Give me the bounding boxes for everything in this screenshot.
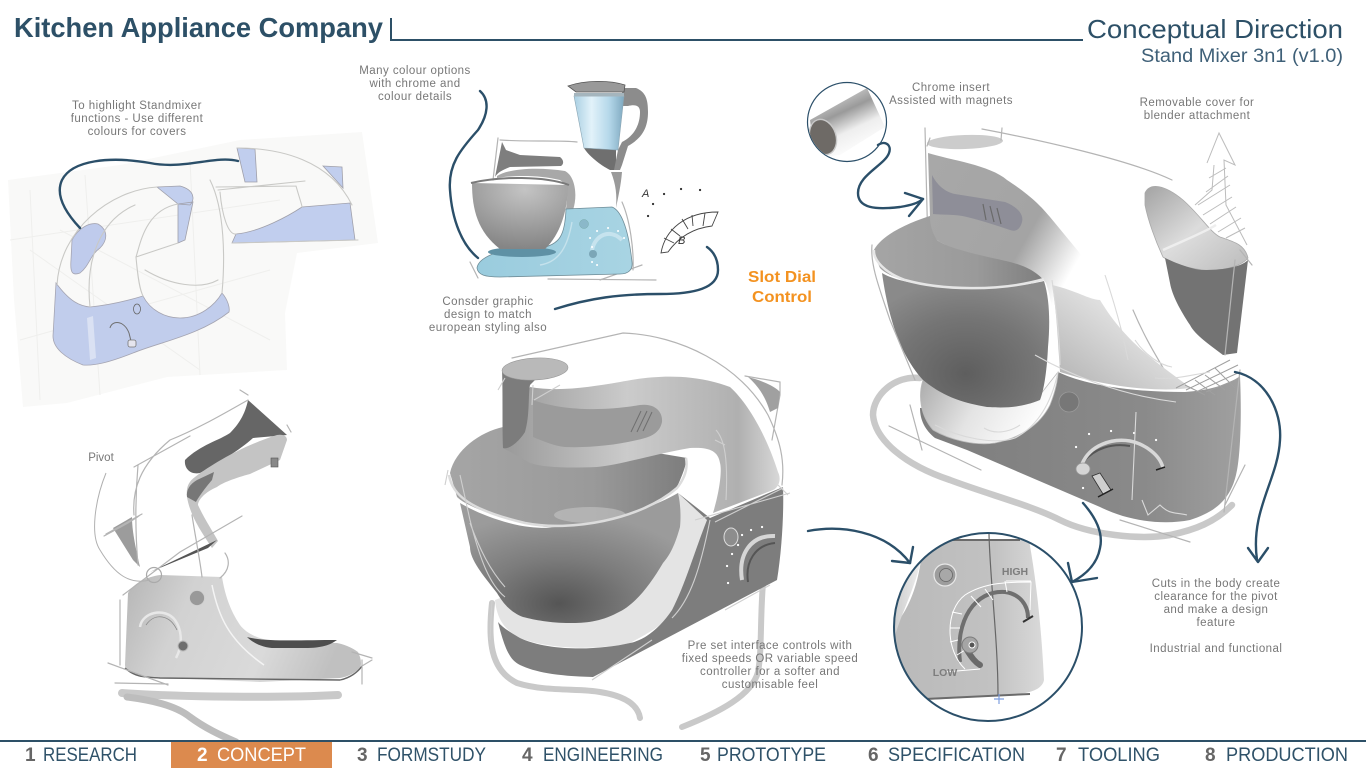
- circle ring: [894, 533, 1082, 721]
- arm: [503, 377, 780, 513]
- note: colour options: with chrome and: [368, 78, 461, 90]
- pencil outlines: [57, 180, 224, 307]
- sketch contour: [925, 128, 1172, 385]
- side button: [190, 590, 204, 606]
- side dial: [140, 613, 181, 658]
- surface sketch lines: [935, 275, 1210, 515]
- note: graphic design: european styling also: [429, 322, 547, 334]
- header rule: [391, 18, 1083, 40]
- note: body cuts: feature: [1197, 617, 1235, 629]
- arrow: graphic design: [555, 247, 718, 309]
- blue crosshair: [994, 694, 1004, 704]
- pivot circle: [146, 568, 162, 582]
- panel: blue marker sketch: [8, 100, 378, 407]
- slot: [932, 175, 1022, 231]
- step 2: CONCEPT: [217, 745, 306, 766]
- note: interface controls: [682, 640, 858, 691]
- bowl recess: [488, 247, 556, 257]
- arm tip: [271, 458, 278, 467]
- note: interface controls: customisable feel: [722, 679, 818, 691]
- panel: dial detail circle: [808, 503, 1101, 721]
- ground shadow: [122, 693, 338, 697]
- ground swoosh: [873, 378, 1232, 537]
- label: high: HIGH: [1002, 566, 1028, 578]
- bowl outer: [460, 493, 680, 623]
- grey arm lower: [497, 169, 575, 210]
- button: [134, 304, 140, 314]
- sketch: option B: [661, 212, 718, 253]
- step 7: 7: [1056, 745, 1067, 766]
- dial knob: [962, 637, 978, 653]
- body: [125, 575, 361, 682]
- arrow: to detail right: [1068, 503, 1101, 582]
- note: body cuts: and make a design: [1164, 604, 1268, 616]
- base button: [1059, 392, 1079, 412]
- detail cradle: [895, 564, 920, 634]
- dial button: [580, 220, 588, 228]
- cylinder top: [501, 356, 569, 382]
- dial dots: [590, 228, 624, 265]
- jug band: [574, 93, 624, 96]
- cradle: [920, 372, 1058, 444]
- note: colours for covers: functions - Use different: [71, 113, 204, 125]
- label: slot dial: [748, 269, 816, 306]
- note: body cuts: Cuts in the body create: [1152, 578, 1280, 590]
- slot grooves: [983, 204, 1001, 224]
- dial arc: [592, 234, 622, 250]
- chrome insert circle: [805, 82, 886, 162]
- jug lid: [568, 81, 625, 92]
- outer sketch lines: [872, 245, 1252, 542]
- sketch: option A: A: [641, 188, 649, 200]
- base bottom edge: [125, 666, 362, 680]
- dial arc shadow: [1083, 445, 1130, 462]
- step 6: SPECIFICATION: [888, 745, 1025, 766]
- lower slot: [967, 650, 980, 665]
- arrow: to detail left: [808, 529, 913, 563]
- base body: [920, 372, 1241, 522]
- bowl rim: [449, 458, 687, 526]
- tower dark: [1165, 258, 1248, 355]
- subtitle: Stand Mixer 3n1 (v1.0): [1141, 46, 1343, 67]
- label: low: LOW: [933, 667, 957, 679]
- exploded sketch outlines: [216, 148, 358, 243]
- dial knob: [1076, 463, 1113, 497]
- construction lines: [10, 160, 280, 400]
- active step highlight: [171, 742, 332, 768]
- note: interface controls: fixed speeds OR variable speed: [682, 653, 858, 665]
- slot grooves: [631, 411, 652, 432]
- note: removable cover: [1140, 97, 1254, 122]
- arrow: cuts to clearance: [1235, 372, 1280, 562]
- detail button: [934, 564, 956, 586]
- note: graphic design: Consder graphic: [442, 296, 534, 308]
- label: slot dial: Control: [752, 289, 812, 306]
- dial ticks: [1076, 431, 1156, 488]
- blue base body: [477, 207, 632, 277]
- top oval: [927, 134, 1003, 150]
- title: Kitchen Appliance Company: [14, 12, 384, 43]
- footer navigation: [0, 740, 1366, 768]
- dark plate: [247, 637, 337, 648]
- dial sketch: [110, 323, 132, 345]
- side dial shadow: [146, 617, 177, 630]
- bowl outer: [882, 273, 1049, 407]
- note: colour options: Many colour options: [359, 65, 471, 77]
- note: removable cover: blender attachment: [1144, 110, 1251, 122]
- dial knob: [128, 340, 136, 347]
- arm slot: [533, 400, 662, 447]
- control dots: [727, 527, 762, 583]
- sketch: option B: B: [678, 235, 685, 247]
- base hatched cut: [1176, 360, 1240, 395]
- step 7: TOOLING: [1078, 745, 1160, 766]
- arrow: note to cover: [60, 160, 238, 228]
- blade cover: [1145, 186, 1248, 270]
- blue highlight: [87, 316, 96, 360]
- panel: blue colour concept: [359, 65, 816, 334]
- lower neck fade: [1052, 285, 1190, 389]
- jug handle: [614, 88, 648, 170]
- panel: side view pivot: [88, 390, 372, 742]
- hatched arrow: [1195, 133, 1247, 245]
- note: chrome insert: [889, 82, 1013, 107]
- cradle: [495, 493, 707, 648]
- arrow: colour options: [450, 91, 487, 258]
- bowl inner: [450, 427, 687, 528]
- seam line: [989, 534, 998, 696]
- note: interface controls: Pre set interface controls with: [688, 640, 852, 652]
- panel: front mixer: [445, 333, 858, 727]
- note: graphic design: [429, 296, 547, 334]
- step 1: RESEARCH: [43, 745, 137, 766]
- note: body cuts: [1150, 578, 1282, 655]
- step 4: 4: [522, 745, 533, 766]
- bowl interior: [873, 215, 1045, 287]
- note: chrome insert: Assisted with magnets: [889, 95, 1013, 107]
- step 8: 8: [1205, 745, 1216, 766]
- exploded blue parts: [232, 148, 355, 243]
- step 5: 5: [700, 745, 711, 766]
- control dial dark: [747, 543, 775, 582]
- pivot pointer line: [95, 473, 150, 581]
- bowl rim: [471, 178, 569, 185]
- bowl floor glow: [554, 507, 626, 523]
- step 4: ENGINEERING: [543, 745, 663, 766]
- dark wedge: [150, 540, 217, 572]
- dial end stop: [1156, 467, 1165, 470]
- grey arm top: [495, 142, 563, 177]
- step 8: PRODUCTION: [1226, 745, 1348, 766]
- blade cover seam: [1163, 225, 1216, 250]
- dial knob: [589, 250, 597, 258]
- control dial: [741, 536, 775, 580]
- footer rule: [0, 740, 1366, 742]
- step 2: 2: [197, 745, 208, 766]
- top cover dark: [185, 400, 287, 473]
- arrow: chrome insert: [858, 143, 923, 216]
- chrome dial arc: [1082, 440, 1163, 468]
- step 3: FORMSTUDY: [377, 745, 486, 766]
- sketch contour: [104, 390, 372, 685]
- note: colours for covers: To highlight Standmixer: [72, 100, 202, 112]
- blue top cover: [157, 186, 193, 243]
- note: pivot: Pivot: [88, 452, 115, 464]
- sketch overlay: [445, 378, 790, 680]
- top and bottom edges: [925, 540, 1030, 699]
- step 3: 3: [357, 745, 368, 766]
- body seam highlight: [212, 585, 264, 665]
- note: graphic design: design to match: [444, 309, 532, 321]
- arm gradient body: [928, 153, 1125, 395]
- note: removable cover: Removable cover for: [1140, 97, 1254, 109]
- pivot wedge: [113, 517, 140, 567]
- note: body cuts: clearance for the pivot: [1154, 591, 1278, 603]
- note: interface controls: controller for a softer and: [700, 666, 840, 678]
- jug body: [574, 96, 624, 150]
- arm lifted: [187, 435, 287, 548]
- rear tower: [748, 377, 780, 412]
- label: slot dial: Slot Dial: [748, 269, 816, 286]
- note: colours for covers: [71, 100, 204, 138]
- bowl rim: [874, 250, 1044, 288]
- sketch paper: [8, 132, 378, 407]
- control button: [724, 528, 738, 546]
- white hood contour: [512, 333, 783, 485]
- step 6: 6: [868, 745, 879, 766]
- dial end stop: [1023, 616, 1033, 622]
- ground swooshes: [490, 583, 763, 727]
- dial knob: [178, 641, 188, 651]
- slot dial: [959, 592, 1028, 662]
- speed scale: [945, 581, 1031, 672]
- note: colour options: [359, 65, 471, 103]
- bowl: [472, 183, 568, 249]
- step 1: 1: [25, 745, 36, 766]
- note: colour options: colour details: [378, 91, 452, 103]
- ground swoosh: [127, 697, 236, 742]
- sketch: option A: [641, 188, 700, 216]
- arm underside: [187, 472, 214, 502]
- blue base cover: [53, 283, 229, 365]
- note: colours for covers: colours for covers: [88, 126, 186, 138]
- cylinder: [502, 370, 535, 448]
- base highlight: [540, 222, 572, 265]
- detail body: [880, 540, 1044, 700]
- jug dark base: [584, 148, 616, 170]
- sketch lines: [470, 138, 656, 280]
- panel: large three-quarter mixer: [805, 82, 1280, 562]
- note: chrome insert: Chrome insert: [912, 82, 990, 94]
- section heading: Conceptual Direction: [1087, 14, 1343, 44]
- blue head cap: [71, 224, 106, 274]
- base: [498, 487, 783, 677]
- note: body cuts: Industrial and functional: [1150, 643, 1282, 655]
- blender connector: [611, 172, 622, 208]
- step 5: PROTOTYPE: [717, 745, 826, 766]
